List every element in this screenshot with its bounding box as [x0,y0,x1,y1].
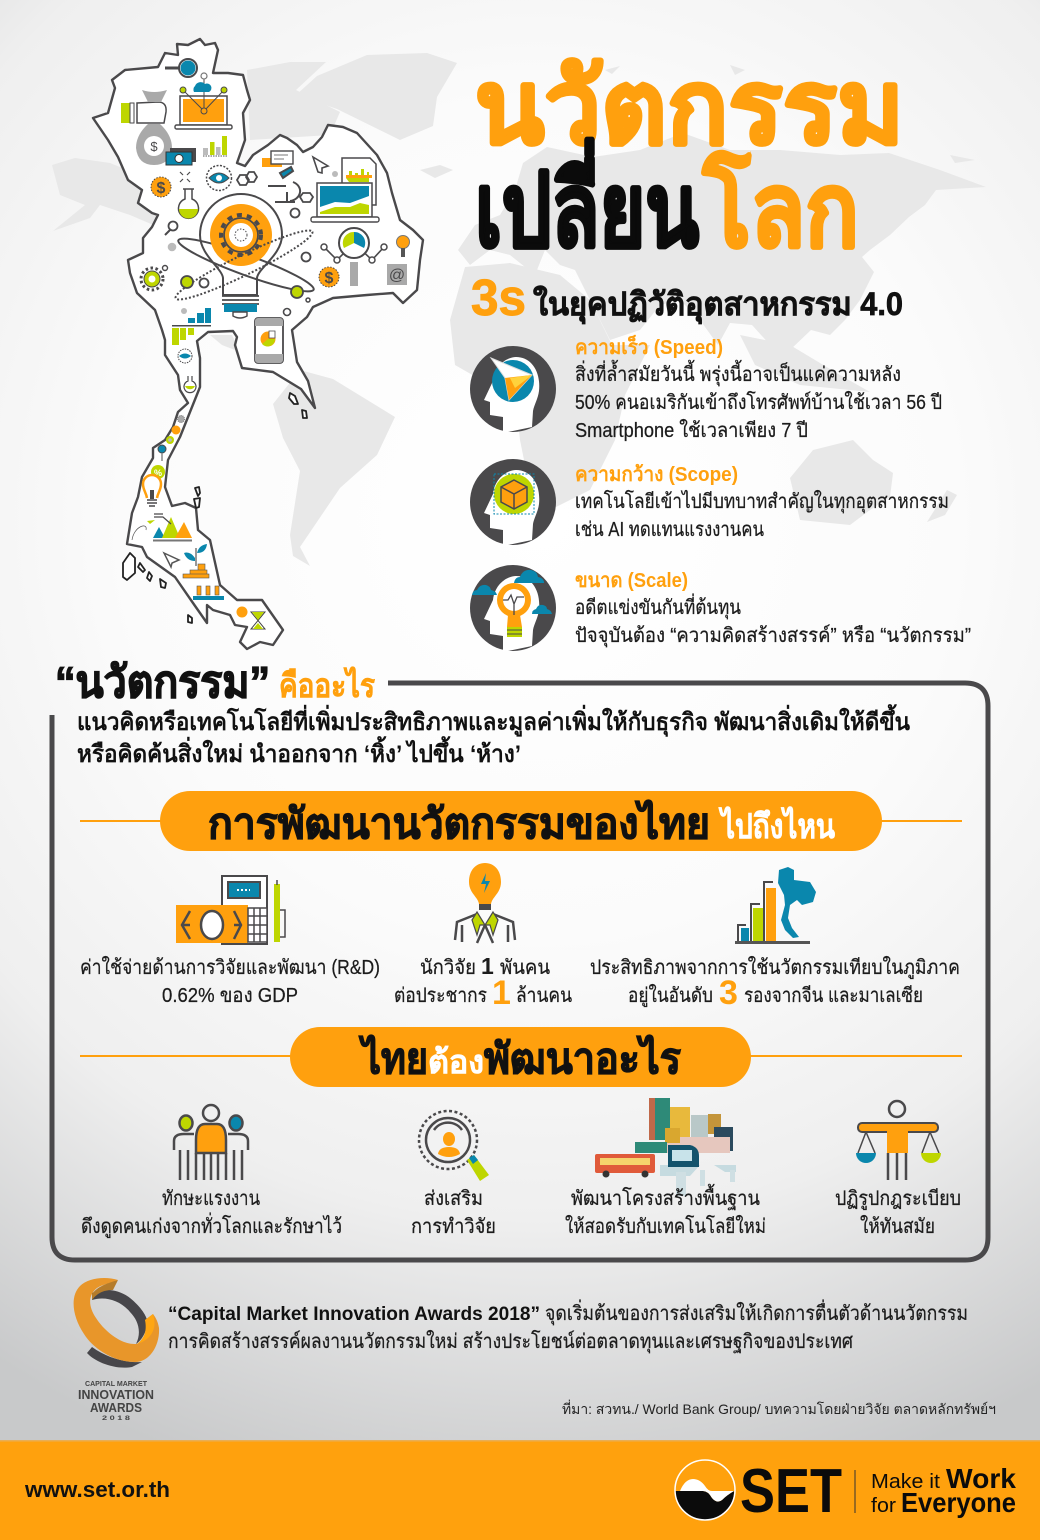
icon: laptop with cloud [175,73,232,129]
banner: what Thailand must develop: ต้อง [428,1044,484,1080]
banner: what Thailand must develop: ไทย [358,1034,428,1082]
text block: scale: ปัจจุบันต้อง “ความคิดสร้างสรรค์” หรือ “นวัตกรรม” [575,624,971,648]
text: regulation: ให้ทันสมัย [860,1215,935,1238]
website: www.set.or.th [24,1477,170,1502]
text: R&D spending [80,956,380,1007]
text block: speed: สิ่งที่ล้ำสมัยวันนี้ พรุ่งนี้อาจเป็นแค่ความหลัง [575,360,901,387]
text block: speed: 50% คนอเมริกันเข้าถึงโทรศัพท์บ้านใช้เวลา 56 ปี [575,391,942,414]
text: R&D spending: ค่าใช้จ่ายด้านการวิจัยและพัฒนา (R&D) [80,956,380,979]
text block: scope: เทคโนโลยีเข้าไปมีบทบาทสำคัญในทุกอุตสาหกรรม [575,490,949,514]
title [475,50,904,268]
tagline: for [871,1495,896,1517]
icon: city infrastructure [595,1098,736,1196]
icon: coin and hourglass [236,606,265,629]
heading: what is innovation: “นวัตกรรม” [55,658,270,707]
icon: speech bubbles [262,151,293,167]
icon: at sign [387,264,407,285]
logo: Capital Market Innovation Awards: 2 0 1 8 [102,1416,131,1422]
text: infrastructure: พัฒนาโครงสร้างพื้นฐาน [571,1184,760,1210]
definition text: หรือคิดค้นสิ่งใหม่ นำออกจาก ‘หิ้ง’ ไปขึ้น ‘ห้าง’ [77,735,521,768]
subtitle: 3s: ในยุคปฏิวัติอุตสาหกรรม 4.0 [533,285,903,325]
title: นวัตกรรม [475,50,904,165]
icon: cursor [313,157,328,173]
text block: scale: อดีตแข่งขันกันที่ต้นทุน [575,593,741,620]
peninsula small icons [151,349,196,479]
text: researchers [394,953,572,1012]
icon: blue and lime bars [172,308,211,345]
text block: scale: ขนาด (Scale) [575,570,688,592]
awards text: จุดเริ่มต้นของการส่งเสริมให้เกิดการตื่นตัวด้านนวัตกรรม [545,1299,968,1326]
text block: scale [575,570,971,648]
icon: document and laptop chart [311,158,379,222]
logo: Capital Market Innovation Awards: CAPITAL MARKET [85,1381,148,1388]
icon: cursor south [164,553,179,567]
icon: plant with coins [183,544,209,578]
icon: research magnifier [419,1111,489,1181]
banner: what Thailand must develop: พัฒนาอะไร [484,1034,681,1082]
icon: flask [179,189,198,218]
SET logo: SET [740,1457,842,1526]
icon: at sign: @ [389,267,405,284]
text: researchers: พันคน [500,957,550,979]
logo: Capital Market Innovation Awards: AWARDS [90,1401,142,1415]
icon: money bag [121,90,172,165]
tagline: Work [946,1463,1016,1494]
title: โลก [702,151,859,268]
icon: researcher [455,863,515,943]
source note: ที่มา: สวทน./ World Bank Group/ บทความโดยฝ่ายวิจัย ตลาดหลักทรัพย์ฯ [562,1400,996,1417]
heading: what is innovation: คืออะไร [279,666,375,704]
icon: small magnifier and gear [141,222,178,290]
title: เปลี่ยน [475,138,699,268]
icon: speed head [470,346,556,433]
icon: microscope [268,167,300,202]
definition text: แนวคิดหรือเทคโนโลยีที่เพิ่มประสิทธิภาพและมูลค่าเพิ่มให้กับธุรกิจ พัฒนาสิ่งเดิมให้ดีขึ้น [77,703,911,738]
logo: Capital Market Innovation Awards: INNOVATION [78,1388,154,1402]
text block: speed: ความเร็ว (Speed) [575,334,723,359]
text block: scope: ความกว้าง (Scope) [575,463,738,486]
text: research [411,1188,496,1238]
icon: chart magnifier [321,228,387,286]
text: infrastructure [565,1184,766,1238]
text: efficiency rank: รองจากจีน และมาเลเซีย [744,985,923,1007]
text: efficiency rank: ประสิทธิภาพจากการใช้นวัตกรรมเทียบในภูมิภาค [590,956,960,980]
banner: how far: ไปถึงไหน [719,806,835,846]
definition text [77,703,911,768]
icon: dollar coin east [319,267,339,287]
text: workforce: ดึงดูดคนเก่งจากทั่วโลกและรักษาไว้ [81,1212,342,1239]
text: efficiency rank: 3 [719,974,738,1012]
icon: scales person [856,1101,941,1180]
icon: scale head [470,565,556,652]
text: researchers: ต่อประชากร [394,985,487,1007]
subtitle: 3s: 3s [471,269,526,326]
icon: dollar coin east: $ [325,270,334,287]
text: infrastructure: ให้สอดรับกับเทคโนโลยีใหม่ [565,1215,766,1238]
footer bar [0,1440,1040,1540]
logo: Capital Market Innovation Awards [74,1278,159,1422]
icon: R&D spending [176,876,285,944]
world map backdrop [52,53,986,566]
icon: workforce [174,1105,248,1180]
text block: speed: Smartphone ใช้เวลาเพียง 7 ปี [575,419,808,442]
icon: bars and Thailand [735,867,816,944]
text block: scope [575,463,949,541]
text block: speed [575,334,942,442]
awards text: “Capital Market Innovation Awards 2018” [168,1304,540,1325]
Thailand map with icons [93,39,423,649]
text: efficiency rank: อยู่ในอันดับ [628,984,713,1008]
icon: money bag: $ [150,139,158,154]
islands [123,393,307,623]
icon: factory [193,586,224,600]
icon: dollar coin [151,177,171,197]
awards text: การคิดสร้างสรรค์ผลงานนวัตกรรมใหม่ สร้างประโยชน์ต่อตลาดทุนและเศรษฐกิจของประเทศ [168,1330,853,1354]
icon: eye [206,166,232,190]
icon: banknotes [166,148,196,165]
SET logo [675,1457,842,1526]
text: workforce: ทักษะแรงงาน [162,1188,260,1210]
icon: small bulb [396,236,410,257]
icon: smartphone [255,318,283,363]
text: efficiency rank [590,956,960,1012]
text: researchers: 1 [481,953,494,979]
text: research: ส่งเสริม [424,1188,483,1210]
icon: magnifier top [165,59,197,77]
tagline [871,1463,1016,1518]
banner: what Thailand must develop [80,1027,962,1087]
icon: bulb with mountains [132,475,192,540]
text: researchers: ล้านคน [516,985,572,1007]
awards text [168,1299,968,1354]
peninsula small icons: % [154,468,162,478]
icon: scope head [470,459,556,546]
banner: how far: การพัฒนานวัตกรรมของไทย [208,799,710,847]
icon: small bars [203,136,227,156]
text block: scope: เช่น AI ทดแทนแรงงานคน [575,519,764,541]
subtitle: 3s [471,269,903,326]
text: researchers: นักวิจัย [420,957,476,979]
tagline: Everyone [901,1487,1016,1518]
banner: how far [80,791,962,851]
panel frame [52,683,988,1260]
text: R&D spending: 0.62% ของ GDP [162,985,298,1007]
text: regulation: ปฏิรูปกฎระเบียบ [835,1188,961,1211]
text: research: การทำวิจัย [411,1216,496,1238]
map outline [93,39,423,649]
tagline: Make it [871,1471,940,1493]
text: researchers: 1 [492,974,511,1012]
icon: dollar coin: $ [157,180,166,197]
text: regulation [835,1188,961,1238]
icon: molecules [180,172,313,218]
text: workforce [81,1188,342,1239]
icon: big lightbulb with gear and atom [171,194,317,318]
